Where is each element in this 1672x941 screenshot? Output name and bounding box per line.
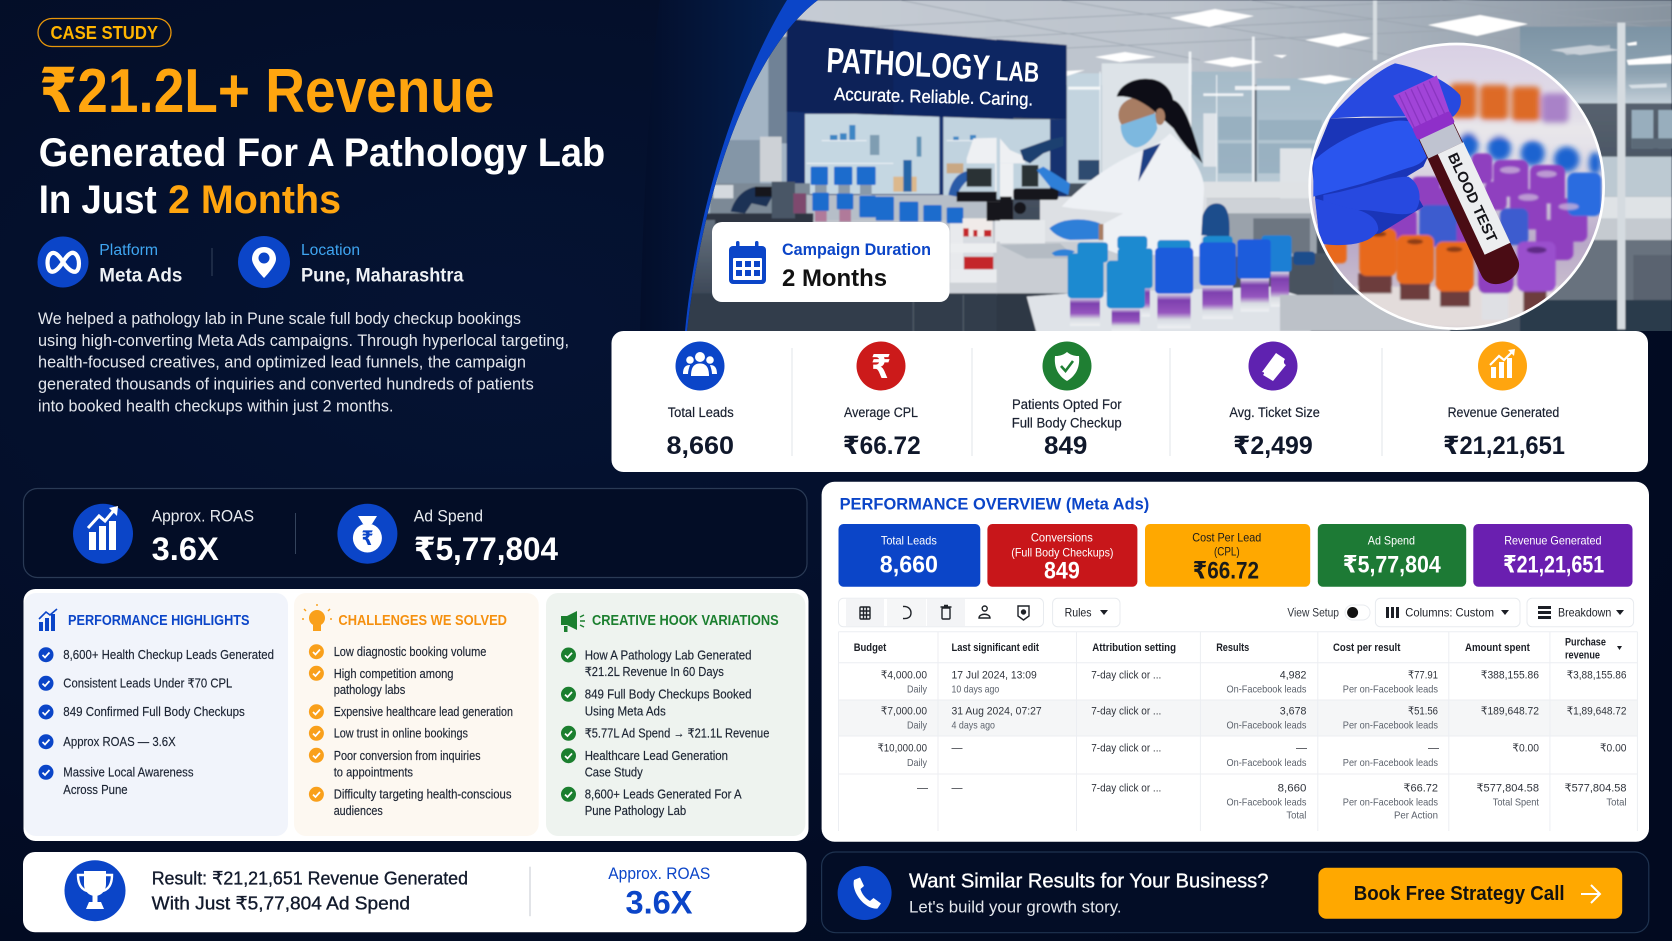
column: challenges: CHALLENGES WE SOLVED: [338, 613, 507, 629]
panel: roas and ad spend: 3.6X: [152, 531, 219, 567]
icon: map pin: [238, 236, 290, 288]
stat: patients opted: Full Body Checkup: [1012, 416, 1122, 431]
column: creative hooks: CREATIVE HOOK VARIATIONS: [592, 613, 779, 629]
table row 3: 7-day click or ...: [1091, 743, 1161, 755]
sign text: Accurate. Reliable. Caring.: [834, 84, 1033, 110]
kpi: cost per lead: [1145, 524, 1310, 587]
microscope right half: [1000, 138, 1025, 163]
arrow: [1581, 885, 1600, 903]
campaign duration card: [712, 222, 950, 302]
table header: Budget: [854, 642, 887, 654]
table header: revenue: [1565, 649, 1600, 661]
icon: meta logo: [38, 236, 88, 288]
table row 4 totals: ₹577,804.58: [1476, 783, 1539, 795]
location info: Pune, Maharashtra: [301, 266, 464, 287]
intro paragraph: generated thousands of inquiries and converted hundreds of patients: [38, 376, 534, 394]
sign text: PATHOLOGY LAB: [826, 41, 1040, 90]
table row 2: ₹7,000.00: [881, 705, 927, 717]
checklist: 8,600+ Leads Generated For A: [585, 788, 742, 802]
checklist: Massive Local Awareness: [63, 766, 193, 780]
panel: performance overview: [822, 482, 1649, 842]
table row 3: Daily: [907, 757, 928, 769]
table row 4 totals: Per on-Facebook leads: [1343, 796, 1438, 808]
table row 4 totals: 7-day click or ...: [1091, 783, 1161, 795]
table row 4 totals: Total Spent: [1493, 796, 1539, 808]
campaign duration card: 2 Months: [782, 265, 887, 292]
table row 4 totals: [917, 783, 1626, 822]
checklist: 849 Full Body Checkups Booked: [585, 688, 752, 702]
table header: Attribution setting: [1092, 642, 1176, 654]
panel: result summary: Result: ₹21,21,651 Revenue Generated: [152, 867, 468, 888]
table row 2: ₹51.56: [1408, 705, 1438, 717]
kpi: conversions: (Full Body Checkups): [1011, 545, 1114, 559]
checklist: 849 Confirmed Full Body Checkups: [63, 705, 245, 719]
checklist: audiences: [334, 804, 383, 818]
checklist: Pune Pathology Lab: [585, 804, 686, 818]
checklist: 8,600+ Health Checkup Leads Generated: [63, 648, 274, 662]
table row 4 totals: ₹66.72: [1404, 783, 1438, 795]
rack of tubes: [1027, 287, 1325, 333]
panel: result summary: Approx. ROAS: [608, 865, 710, 883]
checklist: [561, 648, 769, 818]
table row 4 totals: Total: [1606, 796, 1626, 808]
back wall: [1067, 73, 1102, 183]
checklist: Approx ROAS — 3.6X: [63, 735, 176, 749]
table row 4 totals: —: [917, 783, 928, 795]
column: creative hooks: [546, 593, 805, 836]
panel: result summary: With Just ₹5,77,804 Ad Spend: [152, 892, 410, 913]
intro paragraph: using high-converting Meta Ads campaigns. Through hyperlocal targeting,: [38, 332, 569, 350]
table row 3: —: [1428, 743, 1439, 755]
table row 2: On-Facebook leads: [1226, 720, 1306, 732]
table row 1: ₹388,155.86: [1481, 669, 1539, 681]
heading: PERFORMANCE OVERVIEW (Meta Ads): [840, 494, 1149, 513]
checklist: ₹5.77L Ad Spend → ₹21.1L Revenue: [585, 727, 769, 741]
checklist: Difficulty targeting health-conscious: [334, 788, 512, 802]
table header: Last significant edit: [952, 642, 1039, 654]
stat: total leads: Total Leads: [668, 405, 734, 420]
table header: [854, 637, 1622, 661]
hero photo: pathology lab: [680, 0, 1672, 333]
checklist: Low diagnostic booking volume: [334, 645, 486, 659]
right counter and cabinets: [1202, 180, 1281, 200]
left microscope: [731, 187, 775, 213]
table header: Cost per result: [1333, 642, 1401, 654]
table header: Results: [1216, 642, 1249, 654]
table header: Amount spent: [1465, 642, 1530, 654]
table row 1: 4,982: [1280, 669, 1306, 681]
stat: ticket size: Avg. Ticket Size: [1229, 405, 1320, 420]
stat: average cpl: ₹: [871, 348, 891, 385]
scene left, 3x coordinates: [680, 18, 1015, 333]
icon: phone: [838, 866, 892, 920]
table row 1: ₹4,000.00: [881, 669, 927, 681]
column: performance highlights: PERFORMANCE HIGHLIGHTS: [68, 613, 250, 629]
stat: average cpl: Average CPL: [844, 405, 918, 420]
table row 2: Per on-Facebook leads: [1343, 720, 1438, 732]
blue arc accent: [685, 0, 818, 331]
sign right end: [997, 39, 1067, 119]
checklist: Healthcare Lead Generation: [585, 749, 728, 763]
table row 1: On-Facebook leads: [1226, 683, 1306, 695]
stat: ticket size: ₹2,499: [1233, 432, 1313, 460]
stat: patients opted: [1012, 342, 1122, 460]
table row 1: [881, 669, 1626, 695]
kpi: cost per lead: ₹66.72: [1193, 557, 1259, 584]
microscope left half: [948, 170, 968, 198]
toolbar: Breakdown: [1558, 606, 1611, 620]
kpi: conversions: 849: [1044, 557, 1080, 584]
table row 2: Daily: [907, 720, 928, 732]
intro paragraph: [38, 310, 569, 416]
benches: [710, 182, 811, 214]
kpi: conversions: [987, 524, 1137, 587]
chair: [1200, 203, 1230, 237]
checklist: [309, 644, 513, 818]
table header: Purchase: [1565, 637, 1606, 649]
lights: [1067, 9, 1528, 84]
table row 1: 7-day click or ...: [1091, 669, 1161, 681]
stat: patients opted: 849: [1044, 432, 1087, 460]
platform info: Meta Ads: [99, 266, 182, 287]
scene right, 3x coordinates: [1520, 23, 1672, 333]
table row 2: 7-day click or ...: [1091, 705, 1161, 717]
checklist: pathology labs: [334, 683, 405, 697]
panel: roas and ad spend: Approx. ROAS: [152, 508, 254, 526]
icon: growth chart: [73, 504, 133, 564]
panel: call to action: [822, 852, 1649, 933]
button: book strategy call: [1318, 868, 1622, 919]
table row 1: 10 days ago: [952, 683, 999, 695]
table row 3: —: [952, 743, 962, 755]
table row 2: [881, 705, 1626, 732]
table row 2: ₹1,89,648.72: [1567, 705, 1626, 717]
panel: result summary: [23, 852, 806, 932]
icon: money bag: ₹: [362, 528, 374, 550]
table row 1: 17 Jul 2024, 13:09: [952, 669, 1037, 681]
icon: calendar: [729, 241, 766, 284]
panel: roas and ad spend: [24, 488, 807, 578]
table row 3: —: [1296, 743, 1307, 755]
table row 4 totals: ₹577,804.58: [1565, 783, 1626, 795]
location info: Location: [301, 242, 360, 259]
red sample tubes: [950, 223, 963, 273]
blue tubes behind card: [815, 209, 851, 222]
location info: [238, 236, 464, 288]
title block: [39, 57, 605, 222]
navy band beside photo: [640, 0, 790, 331]
column: challenges: [294, 593, 539, 836]
bench: [997, 242, 1203, 295]
table row 3: [878, 743, 1626, 769]
checklist: How A Pathology Lab Generated: [585, 648, 752, 662]
table row 4 totals: Total: [1286, 810, 1306, 822]
platform info: Platform: [99, 242, 158, 259]
table row 3: Per on-Facebook leads: [1343, 757, 1438, 769]
stat: revenue: ₹21,21,651: [1443, 432, 1565, 460]
checklist: Poor conversion from inquiries: [334, 749, 481, 763]
kpi: ad spend: ₹5,77,804: [1343, 552, 1441, 579]
icon: megaphone: [561, 611, 585, 632]
table row 1: Per on-Facebook leads: [1343, 683, 1438, 695]
intro paragraph: health-focused creatives, and optimized lead funnels, the campaign: [38, 354, 526, 372]
icon: bars: [39, 609, 57, 631]
eyebrow badge: case study: [38, 18, 171, 46]
title block: Generated For A Pathology Lab: [39, 131, 605, 175]
kpi: cost per lead: (CPL): [1214, 545, 1240, 559]
table row 3: On-Facebook leads: [1226, 757, 1306, 769]
tube: BLOOD TEST: [1444, 151, 1499, 245]
stat: patients opted: Patients Opted For: [1012, 397, 1122, 412]
toolbar: [838, 598, 1634, 627]
toolbar: View Setup: [1287, 608, 1339, 620]
panel: result summary: 3.6X: [626, 884, 693, 920]
kpi: total leads: [838, 524, 980, 587]
table row 1: ₹3,88,155.86: [1567, 669, 1626, 681]
table row 4 totals: On-Facebook leads: [1226, 796, 1306, 808]
stat: ticket size: [1229, 342, 1320, 460]
kpi: conversions: Conversions: [1031, 530, 1093, 544]
table row 2: 31 Aug 2024, 07:27: [952, 705, 1042, 717]
kpi: revenue: Revenue Generated: [1504, 533, 1602, 547]
campaign duration card: Campaign Duration: [782, 240, 931, 259]
eyebrow badge: case study: CASE STUDY: [50, 23, 158, 43]
kpi: cost per lead: Cost Per Lead: [1192, 530, 1261, 544]
checklist: Across Pune: [63, 783, 128, 797]
table row 4 totals: 8,660: [1278, 783, 1306, 795]
column: performance highlights: [24, 593, 288, 836]
data table: [838, 632, 1638, 831]
table row 3: ₹10,000.00: [878, 743, 927, 755]
checklist: Expensive healthcare lead generation: [334, 705, 513, 719]
table row 3: ₹0.00: [1512, 743, 1539, 755]
kpi: revenue: [1473, 524, 1632, 587]
table row 3: ₹0.00: [1600, 743, 1626, 755]
tube: [1393, 76, 1528, 292]
sign text: [826, 41, 1040, 110]
stat: total leads: 8,660: [666, 432, 734, 460]
stat: revenue: Revenue Generated: [1448, 405, 1559, 420]
kpi: total leads: Total Leads: [881, 533, 937, 547]
gloved hand: [1312, 63, 1461, 245]
scientist: [1117, 79, 1203, 163]
table row 2: ₹189,648.72: [1481, 705, 1539, 717]
title block: 2 Months: [168, 178, 341, 222]
icons: table tools: [860, 606, 1029, 620]
table row 4 totals: —: [952, 783, 962, 795]
title block: ₹21.2L+ Revenue: [39, 57, 494, 126]
stat: total leads: [666, 342, 734, 460]
panel: key stats: [612, 331, 1648, 472]
table row 1: ₹77.91: [1408, 669, 1438, 681]
table row 1: Daily: [907, 683, 928, 695]
icon: trophy: [64, 860, 126, 921]
stat: revenue: [1443, 342, 1565, 460]
platform info: [38, 236, 182, 288]
checklist: Case Study: [585, 765, 643, 779]
kpi: ad spend: [1318, 524, 1466, 587]
checklist: Low trust in online bookings: [334, 727, 468, 741]
checklist: to appointments: [334, 765, 413, 779]
panel: three column highlights: [24, 589, 808, 841]
stat: average cpl: ₹66.72: [843, 432, 921, 460]
scene centre, 3x coordinates: [997, 37, 1560, 333]
kpi: total leads: 8,660: [880, 552, 938, 579]
table row 2: 3,678: [1280, 705, 1306, 717]
intro paragraph: into booked health checkups within just 2 months.: [38, 398, 394, 416]
kpi: ad spend: Ad Spend: [1368, 533, 1415, 547]
table row 2: 4 days ago: [952, 720, 995, 732]
icon: light bulb: [302, 604, 332, 631]
stat: average cpl: [843, 342, 921, 460]
checklist: [38, 647, 274, 797]
panel: call to action: Let's build your growth story.: [909, 897, 1122, 916]
icon: money bag: [337, 504, 397, 564]
toolbar: Columns: Custom: [1405, 606, 1494, 620]
intro paragraph: We helped a pathology lab in Pune scale full body checkup bookings: [38, 310, 521, 328]
title block: In Just: [39, 178, 157, 222]
checklist: Consistent Leads Under ₹70 CPL: [63, 676, 232, 690]
table row 4 totals: Per Action: [1394, 810, 1438, 822]
circular inset: blood test tube: [1307, 40, 1607, 333]
panel: call to action: Want Similar Results for Your Business?: [909, 871, 1268, 893]
checklist: Using Meta Ads: [585, 704, 666, 718]
toolbar: Rules: [1065, 606, 1092, 620]
kpi: revenue: ₹21,21,651: [1503, 552, 1604, 579]
button: book strategy call: Book Free Strategy Call: [1354, 883, 1565, 905]
checklist: ₹21.2L Revenue In 60 Days: [585, 665, 724, 679]
panel: roas and ad spend: ₹5,77,804: [414, 531, 558, 567]
checklist: High competition among: [334, 667, 454, 681]
panel: roas and ad spend: Ad Spend: [414, 508, 483, 526]
